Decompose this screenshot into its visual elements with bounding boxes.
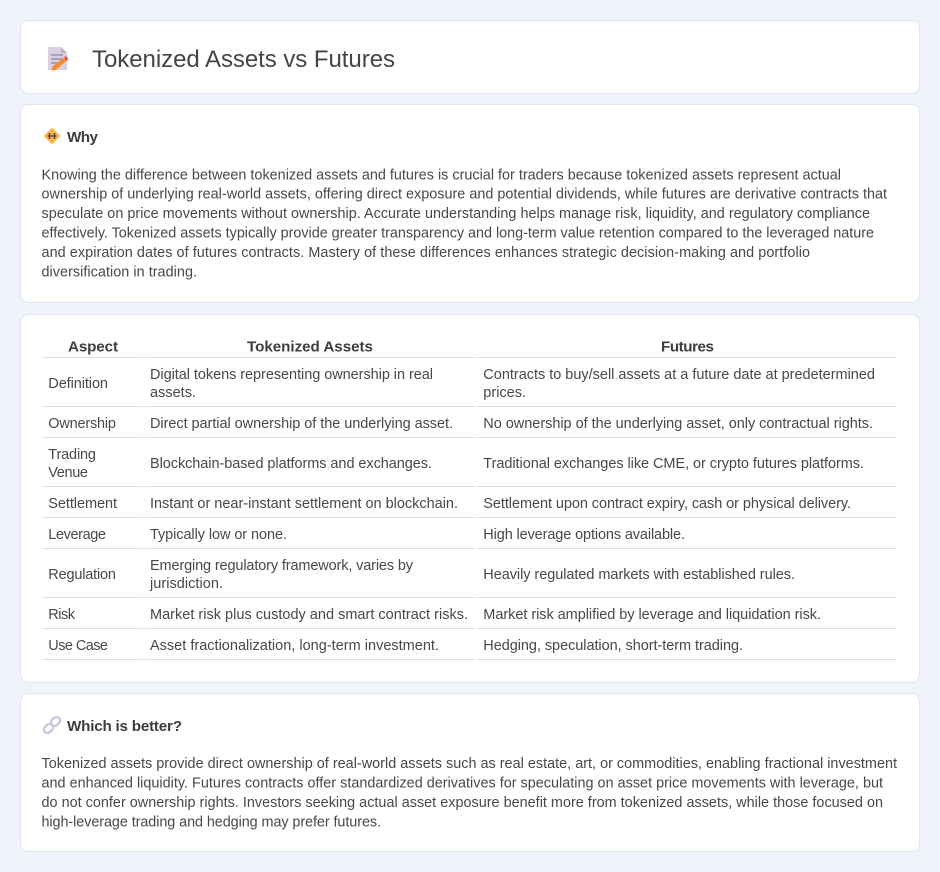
row: definition <box>48 367 875 401</box>
text block: which is better: do not confer ownership rights. Investors seeking actual asset exposure benefit more from tokenized assets, while those focused on <box>42 795 883 811</box>
row: trading venue: Traditional exchanges like CME, or crypto futures platforms. <box>483 456 864 472</box>
row: definition: Digital tokens representing ownership in real <box>150 367 433 383</box>
row: regulation <box>48 558 795 592</box>
row: ownership <box>48 416 873 432</box>
icon: document with pencil <box>48 47 68 71</box>
text block: why: diversification in trading. <box>42 265 197 281</box>
text block: which is better: and enhanced liquidity. Futures contracts offer standardized derivatives for speculating on asset price movements with leverage, but <box>42 776 883 792</box>
table header row: Futures <box>661 339 714 356</box>
text block: why: Knowing the difference between tokenized assets and futures is crucial for traders because tokenized assets represent actual <box>42 167 841 183</box>
text block: which is better: Tokenized assets provide direct ownership of real-world assets such as real estate, art, or commodities, enabling fractional investment <box>42 756 897 772</box>
panel: why <box>20 104 920 302</box>
row: settlement: Instant or near-instant settlement on blockchain. <box>150 496 458 512</box>
table header row: Aspect <box>68 339 118 356</box>
row: risk <box>48 607 821 623</box>
panel: title header <box>20 20 920 94</box>
row: definition: assets. <box>150 385 196 401</box>
row: regulation: Emerging regulatory framework, varies by <box>150 558 414 574</box>
row: leverage: Leverage <box>48 527 106 543</box>
row: regulation: jurisdiction. <box>149 576 223 592</box>
panel: which is better <box>20 694 920 852</box>
row: trading venue: Trading <box>48 447 96 463</box>
heading: why: Why <box>67 129 99 146</box>
row: ownership: Direct partial ownership of the underlying asset. <box>150 416 453 432</box>
row: trading venue: Blockchain-based platforms and exchanges. <box>150 456 432 472</box>
row: settlement <box>48 496 851 512</box>
text block: why: effectively. Tokenized assets typically provide greater transparency and long-term value retention compared to the leveraged nature <box>42 226 874 242</box>
row: ownership: Ownership <box>48 416 116 432</box>
text block: why: speculate on price movements without ownership. Accurate understanding helps manage risk, liquidity, and regulatory compliance <box>42 206 870 222</box>
text block: why <box>42 167 887 281</box>
row: regulation: Regulation <box>48 567 116 583</box>
row: use case: Asset fractionalization, long-term investment. <box>150 638 439 654</box>
row: risk: Market risk amplified by leverage and liquidation risk. <box>483 607 821 623</box>
text block: which is better <box>42 756 897 830</box>
row: settlement: Settlement upon contract expiry, cash or physical delivery. <box>483 496 851 512</box>
table header row: Tokenized Assets <box>247 339 373 356</box>
text block: why: ownership of underlying real-world assets, offering direct exposure and potential dividends, while futures are derivative contracts that <box>42 187 887 203</box>
row: trading venue: Venue <box>48 465 88 481</box>
row: ownership: No ownership of the underlying asset, only contractual rights. <box>483 416 873 432</box>
panel: comparison table <box>20 314 920 682</box>
row: use case: Hedging, speculation, short-term trading. <box>483 638 743 654</box>
row: regulation: Heavily regulated markets with established rules. <box>483 567 795 583</box>
row: definition: Definition <box>48 376 108 392</box>
row: settlement: Settlement <box>48 496 117 512</box>
row: leverage: High leverage options available. <box>483 527 685 543</box>
row: risk: Risk <box>48 607 76 623</box>
row: leverage: Typically low or none. <box>150 527 287 543</box>
icon: warning diamond <box>44 128 60 144</box>
text block: why: and expiration dates of futures contracts. Mastery of these differences enhances strategic decision-making and portfolio <box>42 245 810 261</box>
table header row <box>68 339 714 356</box>
row: risk: Market risk plus custody and smart contract risks. <box>150 607 468 623</box>
row: leverage <box>48 527 685 543</box>
icon: link <box>42 715 62 735</box>
row: use case <box>48 638 743 654</box>
row: trading venue <box>48 447 864 481</box>
text block: which is better: high-leverage trading and hedging may prefer futures. <box>42 814 381 830</box>
row: use case: Use Case <box>48 638 108 654</box>
title: Tokenized Assets vs Futures <box>92 46 395 73</box>
row: definition: Contracts to buy/sell assets at a future date at predetermined <box>483 367 875 383</box>
heading: which is better: Which is better? <box>67 718 182 735</box>
row: definition: prices. <box>483 385 526 401</box>
